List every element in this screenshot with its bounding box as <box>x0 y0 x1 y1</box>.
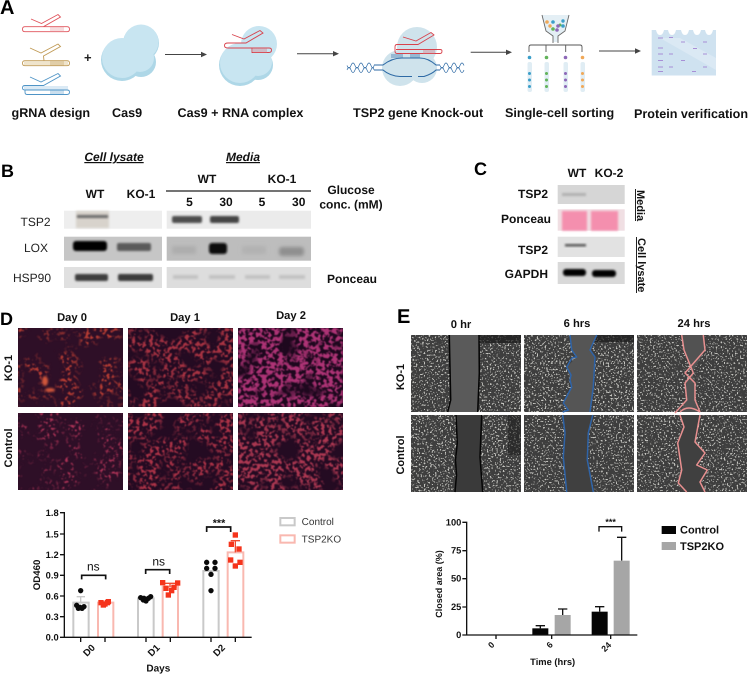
panel letter D: D <box>0 309 13 329</box>
blot: LOX <box>64 237 311 261</box>
significance text <box>87 517 225 573</box>
panel letter B: B <box>1 161 14 181</box>
x tick labels: 0 <box>486 640 496 650</box>
row labels: LOX <box>24 241 48 255</box>
icon: single-cell sorter <box>528 15 585 92</box>
icon: TSP2 gene knock-out <box>347 27 464 86</box>
wound areas <box>448 335 707 492</box>
y tick labels: 25 <box>451 602 461 612</box>
wound outlines <box>448 335 707 492</box>
blot: TSP2 lysate <box>558 237 625 257</box>
control points <box>74 560 218 611</box>
row labels: TSP2 <box>518 243 548 257</box>
step labels: Cas9 + RNA complex <box>178 106 303 120</box>
row labels: GAPDH <box>505 267 548 281</box>
y tick labels: 75 <box>451 545 461 556</box>
bars <box>73 552 243 637</box>
y tick labels <box>46 508 59 643</box>
column headers: KO-1 <box>268 172 297 186</box>
y tick labels: 0.3 <box>46 612 59 622</box>
significance text: ns <box>87 560 100 573</box>
bar chart: closed area: *** <box>605 517 616 527</box>
row labels <box>501 187 551 281</box>
blot: Ponceau <box>558 209 625 231</box>
time headers: 0 hr <box>451 319 472 331</box>
bar chart: closed area <box>434 517 724 667</box>
legend: Control <box>680 523 719 536</box>
step labels: TSP2 gene Knock-out <box>353 106 484 120</box>
error bars <box>536 537 626 628</box>
legend: TSP2KO <box>680 540 724 552</box>
column headers: WT <box>568 166 587 180</box>
row labels: KO-1 <box>395 364 407 390</box>
blot: TSP2 media <box>558 185 625 204</box>
x tick labels: D0 <box>81 642 97 659</box>
TSP2KO points <box>98 532 243 608</box>
micrograph grid <box>18 328 343 490</box>
bar chart: OD460 <box>32 508 341 674</box>
row labels <box>3 355 15 468</box>
x tick labels: 24 <box>599 640 613 654</box>
column headers <box>568 166 624 180</box>
panel: B western blots <box>1 150 383 288</box>
row labels: Ponceau <box>501 212 551 226</box>
step labels: Protein verification <box>634 107 748 121</box>
step labels: Cas9 <box>112 106 142 120</box>
step labels: gRNA design <box>12 106 90 120</box>
error bars <box>77 597 85 603</box>
day headers <box>57 310 306 324</box>
y tick labels <box>446 517 461 640</box>
column headers: KO-1 <box>127 187 156 201</box>
column headers: Media <box>226 150 260 164</box>
column headers: conc. (mM) <box>319 198 383 212</box>
column headers: 5 <box>186 195 193 209</box>
panel: D proliferation <box>0 309 343 674</box>
y tick labels: 1.8 <box>46 508 59 518</box>
icon: Cas9 RNA complex <box>219 26 277 86</box>
y tick labels: 0 <box>456 630 461 640</box>
icon: gRNA set <box>22 14 70 95</box>
axis titles: Time (hrs) <box>530 657 575 667</box>
row labels: TSP2 <box>20 215 51 229</box>
bars <box>532 561 630 635</box>
column headers: Ponceau <box>327 272 377 286</box>
column headers: Glucose <box>327 183 375 197</box>
x tick labels: D1 <box>146 642 162 659</box>
column headers: Cell lysate <box>84 150 144 164</box>
y tick labels: 0.9 <box>46 570 59 581</box>
side label: Media: Media <box>634 190 646 222</box>
column headers: WT <box>198 172 217 186</box>
panel: A workflow <box>0 0 748 121</box>
step labels <box>12 106 748 121</box>
significance text: *** <box>213 517 225 529</box>
day headers: Day 1 <box>170 312 200 324</box>
row labels <box>395 364 407 475</box>
column headers: 30 <box>292 195 306 209</box>
y tick labels: 0.0 <box>46 632 59 643</box>
significance brackets <box>82 527 231 579</box>
time headers: 6 hrs <box>564 318 590 330</box>
panel: E wound healing <box>395 306 747 667</box>
bar chart: closed area: Closed area (%) <box>434 550 444 618</box>
blot: GAPDH <box>558 262 625 284</box>
arrow <box>471 50 512 55</box>
panel letter C: C <box>474 159 487 179</box>
column headers: 5 <box>259 195 266 209</box>
legend: Control <box>302 516 334 527</box>
row labels: Control <box>3 428 15 468</box>
blot: HSP90 <box>64 267 311 288</box>
row labels: HSP90 <box>13 271 51 285</box>
x tick labels: 6 <box>544 640 555 650</box>
column headers: WT <box>86 187 105 201</box>
arrow <box>599 48 641 54</box>
icon: Cas9 protein <box>101 24 159 81</box>
day headers: Day 0 <box>57 312 87 324</box>
y tick labels: 1.5 <box>46 529 59 539</box>
y tick labels: 50 <box>451 573 461 584</box>
row labels <box>13 215 51 285</box>
day headers: Day 2 <box>276 310 306 322</box>
significance text: ns <box>152 555 165 568</box>
axis titles: Days <box>146 663 170 674</box>
step labels: Single-cell sorting <box>505 106 614 120</box>
side label: Cell lysate: Cell lysate <box>635 238 647 292</box>
y tick labels: 0.6 <box>46 591 59 601</box>
arrow <box>297 51 339 56</box>
axes <box>60 512 252 642</box>
y tick labels: 1.2 <box>46 550 59 560</box>
column headers: 30 <box>219 195 233 209</box>
row labels: Control <box>395 435 407 475</box>
arrow <box>165 52 207 57</box>
x tick labels <box>81 642 227 659</box>
plus sign: + <box>84 50 92 65</box>
time headers <box>451 318 710 331</box>
y tick labels: 100 <box>446 517 461 527</box>
micrograph grid <box>411 335 747 492</box>
column headers: KO-2 <box>595 166 624 180</box>
row labels: TSP2 <box>518 187 548 201</box>
panel: C western blots <box>474 159 647 293</box>
row labels: KO-1 <box>3 355 15 381</box>
axes <box>462 522 637 639</box>
panel letter E: E <box>397 306 410 328</box>
column headers <box>84 150 383 286</box>
significance bracket <box>599 527 622 532</box>
legend <box>662 523 724 552</box>
icon: protein gel <box>652 30 716 76</box>
bar chart: OD460: OD460 <box>32 560 42 590</box>
legend: TSP2KO <box>302 534 341 545</box>
blot: TSP2 <box>64 211 311 229</box>
legend <box>280 516 341 545</box>
x tick labels <box>486 640 613 654</box>
x tick labels: D2 <box>211 642 227 659</box>
time headers: 24 hrs <box>678 318 710 330</box>
